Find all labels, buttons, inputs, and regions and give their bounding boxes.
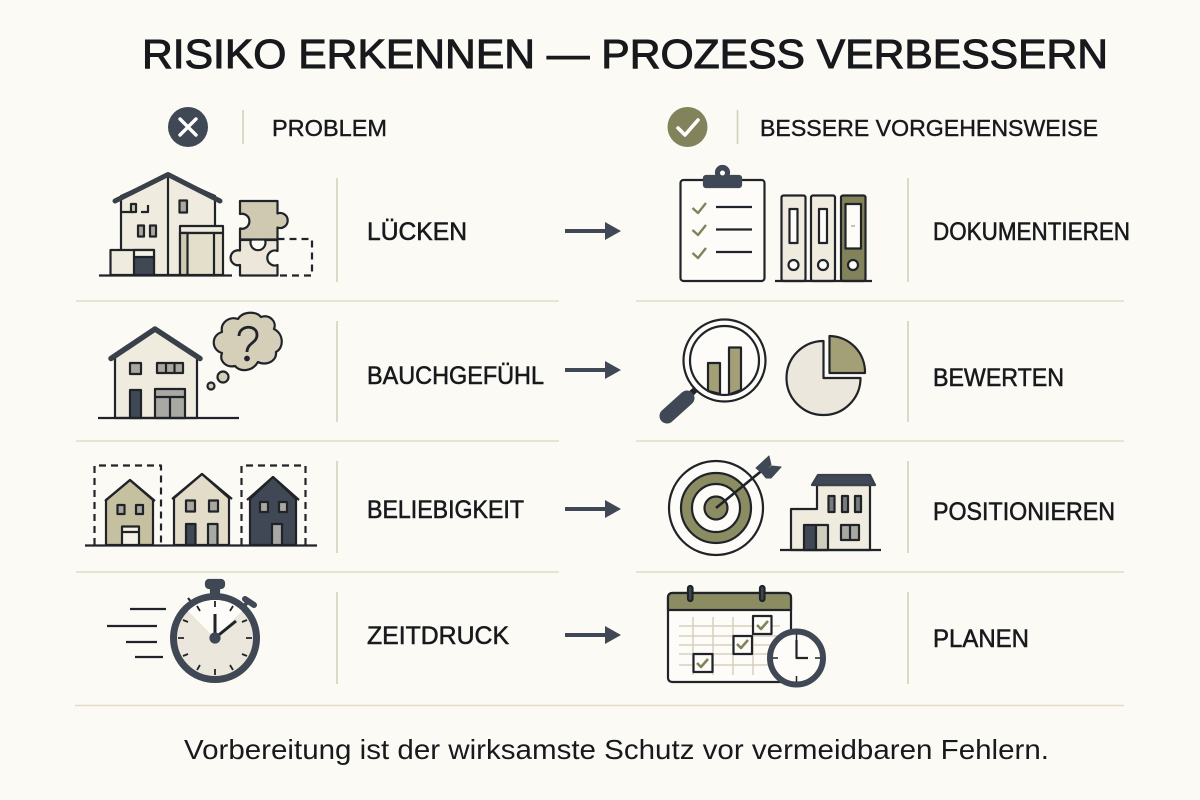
label: Beliebigkeit: BELIEBIGKEIT [367, 496, 524, 524]
puzzle pieces [231, 201, 312, 276]
thought cloud [208, 313, 282, 390]
label: Bauchgefühl: BAUCHGEFÜHL [367, 362, 544, 390]
icon: three houses [85, 466, 317, 546]
label: Planen: PLANEN [933, 625, 1029, 653]
footer message: Vorbereitung ist der wirksamste Schutz vor vermeidbaren Fehlern. [184, 734, 1049, 765]
label: Bewerten: BEWERTEN [933, 364, 1064, 392]
icon: clipboard and binders [680, 166, 872, 281]
icon: stopwatch [107, 580, 256, 680]
icon: x circle [168, 107, 208, 147]
arrow 4 [565, 626, 621, 644]
icon: target and building [669, 456, 881, 555]
label: Dokumentieren: DOKUMENTIEREN [933, 218, 1130, 246]
heading: better approach: BESSERE VORGEHENSWEISE [760, 115, 1098, 141]
label: Positionieren: POSITIONIEREN [933, 498, 1115, 526]
heading: problem: PROBLEM [272, 115, 387, 141]
arrow 2 [565, 361, 621, 379]
icon: check circle [668, 107, 708, 147]
title: RISIKO ERKENNEN — PROZESS VERBESSERN [142, 31, 1108, 77]
label: Zeitdruck: ZEITDRUCK [367, 622, 509, 650]
icon: house with puzzle [99, 174, 312, 276]
icon: house with question cloud [98, 313, 282, 418]
column header: problem [168, 107, 387, 147]
arrow 3 [565, 500, 621, 518]
column header: better approach [668, 107, 1098, 147]
icon: calendar with clock [668, 586, 823, 684]
icon: magnifier and pie chart [667, 320, 865, 416]
label: Lücken: LÜCKEN [367, 218, 467, 246]
arrow 1 [565, 222, 621, 240]
